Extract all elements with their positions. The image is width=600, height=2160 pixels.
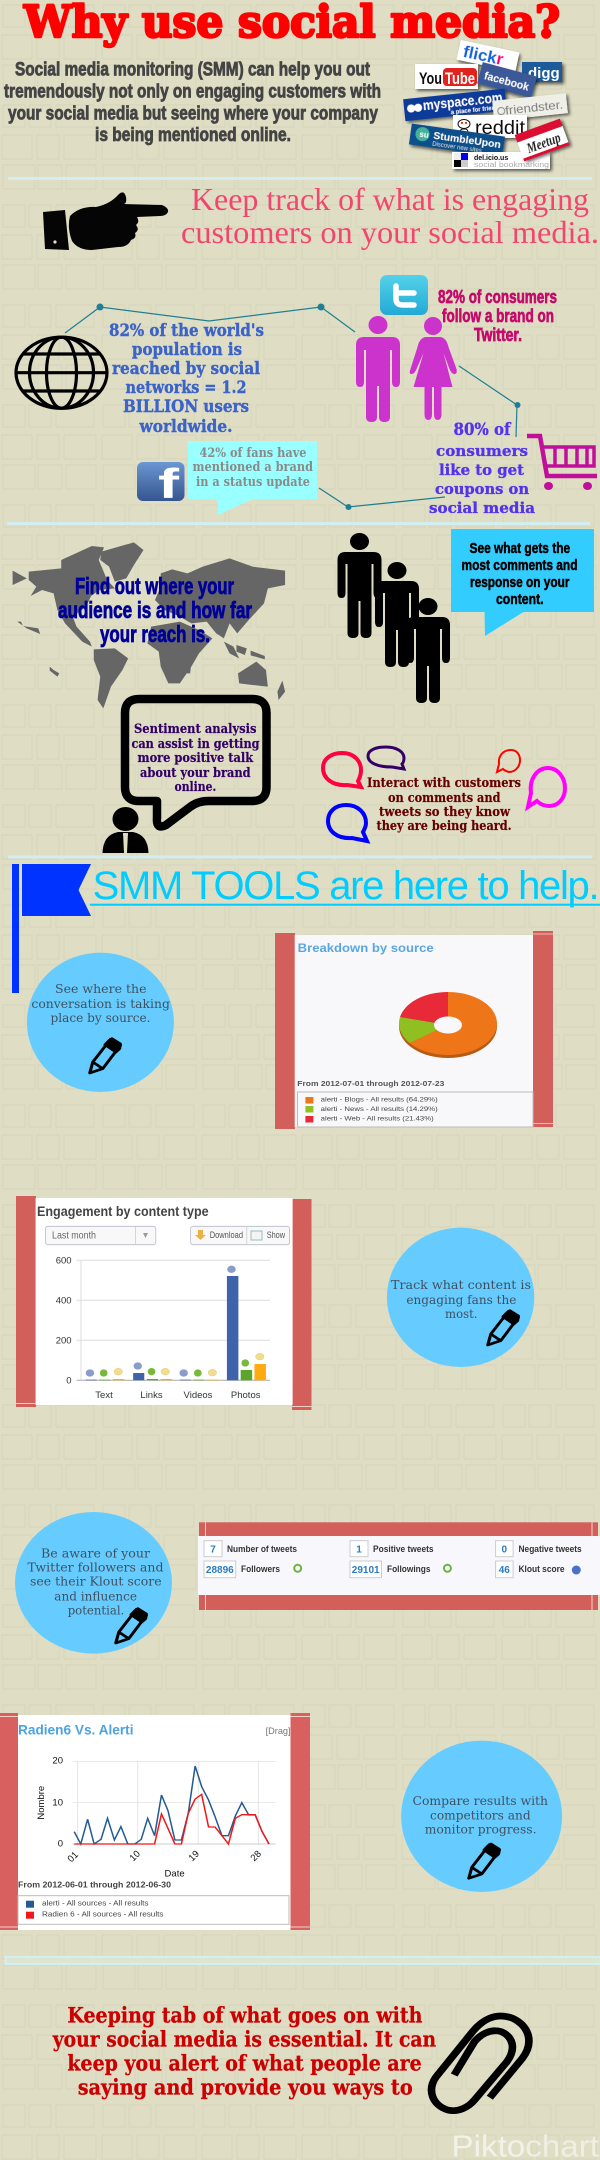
icon: pencil <box>116 1609 146 1643</box>
tool 4: circle text <box>401 1741 562 1892</box>
donut chart <box>399 992 497 1058</box>
tool 2: engagement card: Engagement by content type <box>37 1203 209 1219</box>
stat: world population: BILLION users <box>123 397 249 417</box>
tool 4: circle text: competitors and <box>430 1807 531 1822</box>
icon: flag <box>12 864 91 993</box>
tool 4: comparison card: alerti - All sources - All results <box>42 1900 149 1907</box>
tool 1: breakdown by source card: alerti - Blogs - All results (64.29%) <box>321 1096 438 1104</box>
social network logos cluster: a place for friends <box>451 105 503 116</box>
line chart: 01 <box>66 1850 81 1865</box>
bar chart: Links <box>140 1390 163 1401</box>
stat: world population: networks = 1.2 <box>126 378 246 398</box>
tool 3: circle text: see their Klout score <box>30 1574 162 1589</box>
tool 1: breakdown by source card: Breakdown by source <box>298 941 434 955</box>
stat: twitter: 82% of consumers <box>438 287 557 307</box>
bar chart: 0 <box>66 1376 72 1386</box>
heading: keep track: Keep track of what is engaging <box>191 181 589 217</box>
map text: Find out where your <box>75 573 234 599</box>
icon: paperclip <box>432 2016 529 2111</box>
line chart: 10 <box>128 1849 143 1864</box>
tool 2: circle text: most. <box>445 1306 478 1321</box>
callout: comments: content. <box>496 591 544 608</box>
intro text block <box>4 60 381 146</box>
tool 2: circle text <box>387 1228 534 1367</box>
callout: sentiment analysis: about your brand <box>140 766 251 781</box>
tool 4: circle text: Compare results with <box>412 1793 548 1808</box>
callout: comments: See what gets the <box>470 540 570 557</box>
callout: sentiment analysis: online. <box>174 780 216 795</box>
social network logos cluster: Meetup <box>524 130 563 157</box>
line chart: 19 <box>187 1849 202 1864</box>
tool 1: breakdown by source card <box>275 931 553 1129</box>
icon: globe <box>16 337 107 408</box>
text: interact with customers: they are being heard. <box>376 819 512 834</box>
icon: facebook <box>137 460 184 507</box>
social network logos cluster: flickr <box>461 42 506 69</box>
line chart: Date <box>165 1868 185 1879</box>
stat: coupons: social media <box>429 499 535 517</box>
bar chart: Text <box>95 1390 113 1401</box>
social network logos cluster: friendster. <box>505 98 564 118</box>
icon: twitter <box>380 275 428 315</box>
callout: status update: 42% of fans have <box>200 446 306 461</box>
tool 3: twitter stats card: 29101 <box>352 1565 380 1576</box>
icon: three people <box>338 533 450 703</box>
line chart: 0 <box>58 1838 63 1849</box>
tool 3: twitter stats card: Followings <box>387 1564 430 1574</box>
icon: woman <box>410 317 457 420</box>
map text: audience is and how far <box>58 597 252 623</box>
heading: keep track <box>181 181 599 250</box>
bar chart: 400 <box>56 1296 72 1306</box>
intro text block: your social media but seeing where your company <box>8 104 378 124</box>
tool 3: circle text: and influence <box>54 1588 137 1603</box>
stat: coupons: like to get <box>439 461 524 479</box>
stat: world population <box>109 321 264 437</box>
tool 4: comparison card: Radien 6 - All sources - All results <box>42 1911 164 1918</box>
tool 1: breakdown by source card: alerti - Web - All results (21.43%) <box>321 1116 434 1122</box>
icon: shopping cart <box>527 436 597 490</box>
tool 3: twitter stats card: Positive tweets <box>373 1544 434 1554</box>
stat: world population: 82% of the world's <box>109 321 264 341</box>
tool 3: twitter stats card: 7 <box>210 1544 216 1556</box>
callout: status update: in a status update <box>196 475 310 490</box>
stat: coupons: consumers <box>436 442 528 460</box>
tool 4: circle text: monitor progress. <box>425 1821 536 1836</box>
tool 2: engagement card: Last month <box>52 1230 96 1241</box>
social network logos cluster: del.icio.us <box>474 155 508 162</box>
bar chart: Videos <box>184 1390 213 1401</box>
callout: status update: mentioned a brand <box>192 460 313 475</box>
tool 3: twitter stats card <box>198 1522 600 1610</box>
icon: pencil <box>90 1039 120 1073</box>
icon: pencil <box>469 1844 499 1878</box>
callout: sentiment analysis: more positive talk <box>138 751 254 766</box>
tool 3: twitter stats card: Klout score <box>518 1564 564 1574</box>
callout: sentiment analysis <box>125 699 266 826</box>
map text <box>58 573 252 647</box>
tool 3: twitter stats card: 0 <box>502 1544 508 1556</box>
social network logos cluster <box>403 40 569 169</box>
social network logos cluster: Tube <box>445 69 475 88</box>
connector lines <box>65 304 520 510</box>
world map <box>13 542 285 708</box>
tool 2: engagement card: Show <box>267 1230 286 1240</box>
callout: sentiment analysis: Sentiment analysis <box>134 722 256 737</box>
tool 1: circle text: conversation is taking <box>31 996 170 1011</box>
line chart: 28 <box>249 1849 264 1864</box>
closing text <box>52 2003 436 2100</box>
map text: your reach is. <box>100 621 210 647</box>
tool 3: twitter stats card: Followers <box>241 1564 280 1574</box>
line chart: 20 <box>52 1756 63 1767</box>
line chart: Nombre <box>36 1786 47 1820</box>
line chart: 10 <box>52 1797 63 1808</box>
social network logos cluster: su <box>419 130 429 140</box>
intro text block: is being mentioned online. <box>95 125 291 146</box>
intro text block: tremendously not only on engaging customers with <box>4 82 381 102</box>
stat: twitter: Twitter. <box>474 325 522 345</box>
text: interact with customers: Interact with customers <box>367 776 521 791</box>
tool 3: circle text: Be aware of your <box>41 1546 150 1561</box>
bar chart: 200 <box>56 1336 72 1346</box>
stat: coupons: 80% of <box>454 420 512 440</box>
text: interact with customers: tweets so they know <box>379 805 511 820</box>
closing text: your social media is essential. It can <box>52 2027 436 2052</box>
tool 1: circle text: See where the <box>55 981 146 996</box>
stat: coupons <box>429 420 535 517</box>
tool 4: comparison card: [Drag] <box>266 1726 291 1737</box>
stat: twitter: follow a brand on <box>442 306 554 326</box>
bar chart <box>56 1256 270 1401</box>
stat: twitter <box>438 287 557 345</box>
line chart <box>36 1756 276 1879</box>
closing text: keep you alert of what people are <box>67 2051 422 2076</box>
stat: world population: population is <box>132 340 242 360</box>
tool 2: engagement card: Download <box>210 1230 243 1240</box>
text: interact with customers: on comments and <box>388 791 500 806</box>
icon: pointing hand <box>43 192 168 250</box>
social network logos cluster: Discover new sites <box>432 142 482 155</box>
callout: status update <box>188 441 317 515</box>
social network logos cluster: reddit <box>475 118 526 139</box>
tool 1: breakdown by source card: From 2012-07-01 through 2012-07-23 <box>297 1079 444 1088</box>
stat: world population: worldwide. <box>139 417 232 437</box>
closing text: Keeping tab of what goes on with <box>67 2003 422 2028</box>
bar chart: Photos <box>231 1390 261 1401</box>
icon: facebook: f <box>158 460 180 507</box>
tool 3: circle text: potential. <box>68 1602 124 1617</box>
stat: coupons: coupons on <box>435 480 529 498</box>
tool 3: twitter stats card: Number of tweets <box>227 1544 297 1554</box>
tool 2: circle text: Track what content is <box>391 1277 531 1292</box>
tool 4: comparison card: Radien6 Vs. Alerti <box>18 1721 134 1737</box>
social network logos cluster: social bookmarking <box>474 162 549 169</box>
social network logos cluster: digg <box>528 65 560 82</box>
tool 3: twitter stats card: 46 <box>499 1565 510 1576</box>
tool 4: comparison card <box>0 1713 310 1930</box>
icon: man <box>356 316 400 422</box>
icons: speech bubbles <box>323 747 565 841</box>
tool 3: twitter stats card: 1 <box>356 1544 362 1556</box>
icon: businessman <box>102 807 148 853</box>
bar chart: 600 <box>56 1256 72 1266</box>
tool 1: circle text: place by source. <box>50 1010 150 1025</box>
intro text block: Social media monitoring (SMM) can help you out <box>15 60 371 80</box>
social network logos cluster: You <box>419 69 442 88</box>
heading: keep track: customers on your social media. <box>181 214 599 250</box>
stat: world population: reached by social <box>112 359 260 379</box>
callout: comments <box>451 529 594 636</box>
tool 2: engagement card <box>16 1196 312 1410</box>
social network logos cluster: facebook <box>483 70 531 94</box>
icon: pencil <box>488 1311 518 1345</box>
heading: SMM tools: SMM TOOLS are here to help. <box>93 864 600 908</box>
callout: comments: response on your <box>470 574 570 591</box>
tool 3: twitter stats card: Negative tweets <box>518 1544 582 1554</box>
tool 3: circle text: Twitter followers and <box>28 1560 164 1575</box>
tool 4: comparison card: From 2012-06-01 through 2012-06-30 <box>18 1881 172 1890</box>
tool 1: circle text <box>27 953 174 1092</box>
text: interact with customers <box>367 776 521 834</box>
closing text: saying and provide you ways to <box>78 2075 413 2100</box>
tool 2: circle text: engaging fans the <box>406 1292 516 1307</box>
social network logos cluster: myspace.com <box>422 89 503 113</box>
tool 3: circle text <box>15 1512 172 1654</box>
social network logos cluster: StumbleUpon <box>433 131 501 151</box>
tool 1: breakdown by source card: alerti - News - All results (14.29%) <box>321 1106 438 1113</box>
callout: sentiment analysis: can assist in getting <box>132 737 260 752</box>
tool 3: twitter stats card: 28896 <box>206 1565 234 1576</box>
